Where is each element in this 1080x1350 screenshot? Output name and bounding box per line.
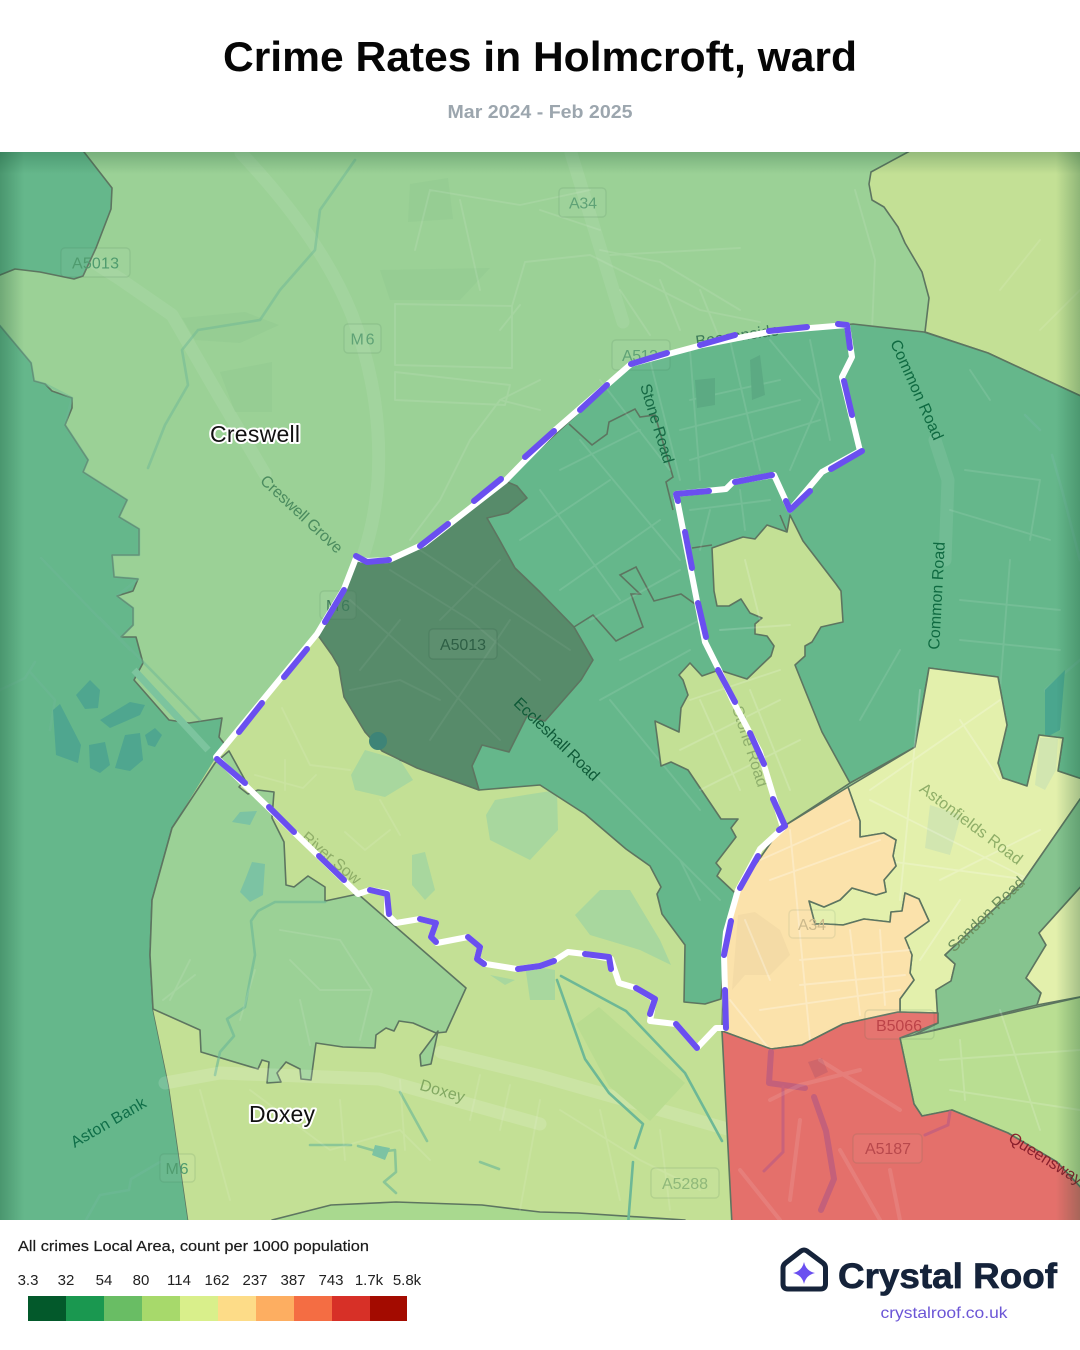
road label: B5066: B5066 [876,1018,922,1035]
lime district streets [680,560,800,790]
subtitle: date range: Mar 2024 - Feb 2025 [448,102,632,122]
Doxey north district [150,751,466,1083]
red district water and buildings [769,1052,834,1210]
local roads Doxey [200,1075,700,1210]
road label: A34 town: A34 [798,917,826,934]
local roads ward south [255,708,400,850]
green strip district east [914,792,1080,1035]
map edge shading top [0,152,1080,174]
main green district: Holmcroft and east [340,324,1080,1004]
logo: Crystal Roof [783,1250,1057,1322]
street label: Eccleshall Road: Eccleshall Road [510,695,602,785]
motorways north [0,153,623,556]
legend values: 3.3 [18,1272,38,1289]
street label: Astonfields Road: Astonfields Road [916,780,1025,869]
map edge shading right [1056,152,1080,1220]
dark green district (lowest crime) [317,481,593,790]
road label: A5013 north-west [61,248,130,277]
small building shading in ward [695,355,765,408]
golf course south [576,1007,685,1121]
south district lime [150,632,731,1225]
red district (highest crime) [722,1012,1080,1225]
Common Road path [935,440,948,560]
street label: Creswell Grove: Creswell Grove [257,472,346,557]
logo wordmark: Crystal Roof [838,1257,1057,1296]
road label: A34 north: A34 [569,196,597,212]
choropleth map [0,147,1080,1225]
street label: Stone Road north: Stone Road [636,382,676,465]
road label: A5288: A5288 [662,1176,708,1193]
legend values: 114 [167,1272,191,1289]
legend values: 162 [204,1272,230,1289]
Doxey streets [163,930,372,1045]
legend title: All crimes Local Area, count per 1000 population [18,1238,369,1255]
ward outline white [216,325,860,1048]
road label: A5013 central: A5013 [440,637,486,654]
Doxey small blob [420,1031,438,1066]
road label: M6 south: M6 [166,1161,189,1178]
street label: Stone Road south: Stone Road [728,704,770,789]
legend values: 5.8k [393,1272,422,1289]
top-left district [0,147,112,279]
road label: M6 north: M6 [350,332,375,348]
dark district pond [369,732,387,750]
legend values: 80 [133,1272,149,1289]
legend values: 743 [318,1272,344,1289]
faint map shading north [182,178,490,412]
road label: M6 central [320,591,356,619]
green spaces in ward [351,750,671,1000]
rivers and railway west [0,326,139,637]
icon: house with star [783,1250,826,1289]
base area: Creswell [0,152,1050,1036]
legend [18,1238,422,1321]
road label: M6 central: M6 [326,598,350,615]
road label: A5187 [853,1134,922,1163]
green district street grid [520,340,1060,900]
streams south [557,976,722,1225]
road label: A5187: A5187 [865,1141,911,1158]
road label: A5288 [651,1168,719,1198]
ward outline purple dashes [217,324,862,1048]
legend colour scale [28,1296,407,1321]
legend values: 387 [280,1272,306,1289]
street label: Beaconside: Beaconside [695,322,780,351]
place label: Creswell: Creswell [210,421,300,447]
lime district east of the ward line [655,515,850,892]
road label: A513: A513 [622,348,658,365]
internal boundaries in green district [569,409,787,641]
road label: A5013 central [429,629,497,659]
legend values: 1.7k [355,1272,384,1289]
eastern canal [1024,414,1066,731]
water bodies west [53,680,162,773]
lime top right streets [1000,240,1080,330]
title: Crime Rates in Holmcroft, ward [223,33,857,80]
Holmcroft ward boundary [216,324,862,1048]
road label: M6 south [160,1154,195,1182]
place label: Doxey: Doxey [249,1101,316,1127]
Doxey main road [165,1052,731,1130]
street label: Aston Bank: Aston Bank [68,1094,150,1151]
river district west [0,320,227,1225]
street label: Sandon Road: Sandon Road [945,874,1029,956]
website link: crystalroof.co.uk [880,1305,1009,1322]
south district strip [271,1201,686,1220]
legend values [18,1272,422,1289]
legend values: 237 [242,1272,268,1289]
water and streams south-west [214,900,500,1194]
south-east light green district [900,996,1080,1192]
road label: A513 [612,340,670,370]
orange district streets and park [732,912,790,990]
road label: A34 town [789,910,835,938]
road label: A34 north [559,188,606,217]
pale east district [809,668,1080,1013]
street label: Common Road upper: Common Road [886,337,946,443]
top-right district [869,147,1080,398]
legend values: 54 [96,1272,112,1289]
road label: B5066 [865,1010,934,1039]
pale corner district [1026,882,1080,1005]
map edge shading left [0,152,24,1220]
orange town centre district [722,787,929,1049]
road label: A5013 north-west: A5013 [72,256,119,272]
legend values: 32 [58,1272,74,1289]
local roads north [395,190,875,540]
street label: River Sow: River Sow [298,829,364,888]
dark district streets [350,550,570,740]
pale east features [925,738,1058,855]
road label: M6 north [344,324,381,353]
street label: Doxey: Doxey [418,1077,467,1106]
street label: Common Road lower: Common Road [926,541,949,650]
